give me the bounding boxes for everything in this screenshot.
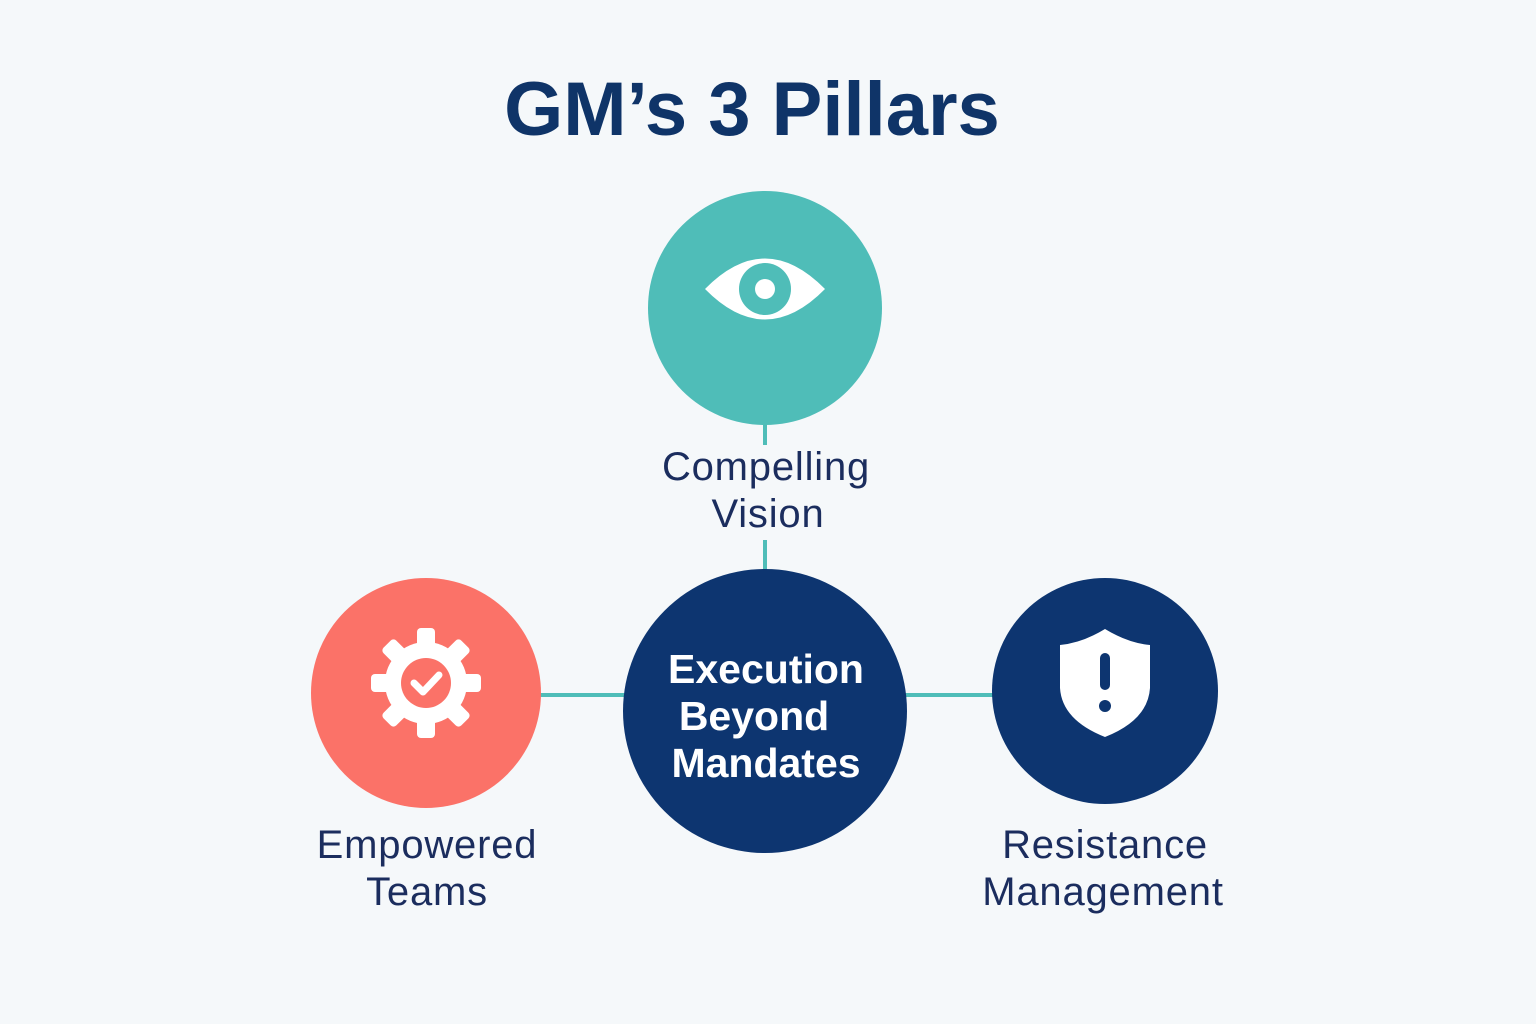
label: empowered teams: Empowered [317,823,537,867]
pillar: compelling vision [648,191,882,536]
icon: eye [705,258,825,320]
label: resistance management: Resistance [1002,823,1208,867]
hub: execution beyond mandates [623,569,907,853]
icon: shield with exclamation [1060,629,1150,737]
title: GM’s 3 Pillars [504,67,1000,152]
hub: execution beyond mandates: Mandates [671,740,861,786]
pillar: resistance management [982,578,1224,914]
label: empowered teams: Teams [366,870,488,914]
label: compelling vision: Compelling [662,445,870,489]
hub: execution beyond mandates: Execution [668,646,864,692]
label: compelling vision: Vision [711,492,825,536]
connector: left to center [538,693,626,697]
icon: gear with check [348,605,504,761]
hub: execution beyond mandates: Beyond [679,693,829,739]
connector: top to center [763,420,767,572]
pillar: empowered teams [311,578,541,914]
connector: right to center [905,693,995,697]
label: resistance management: Management [982,870,1224,914]
